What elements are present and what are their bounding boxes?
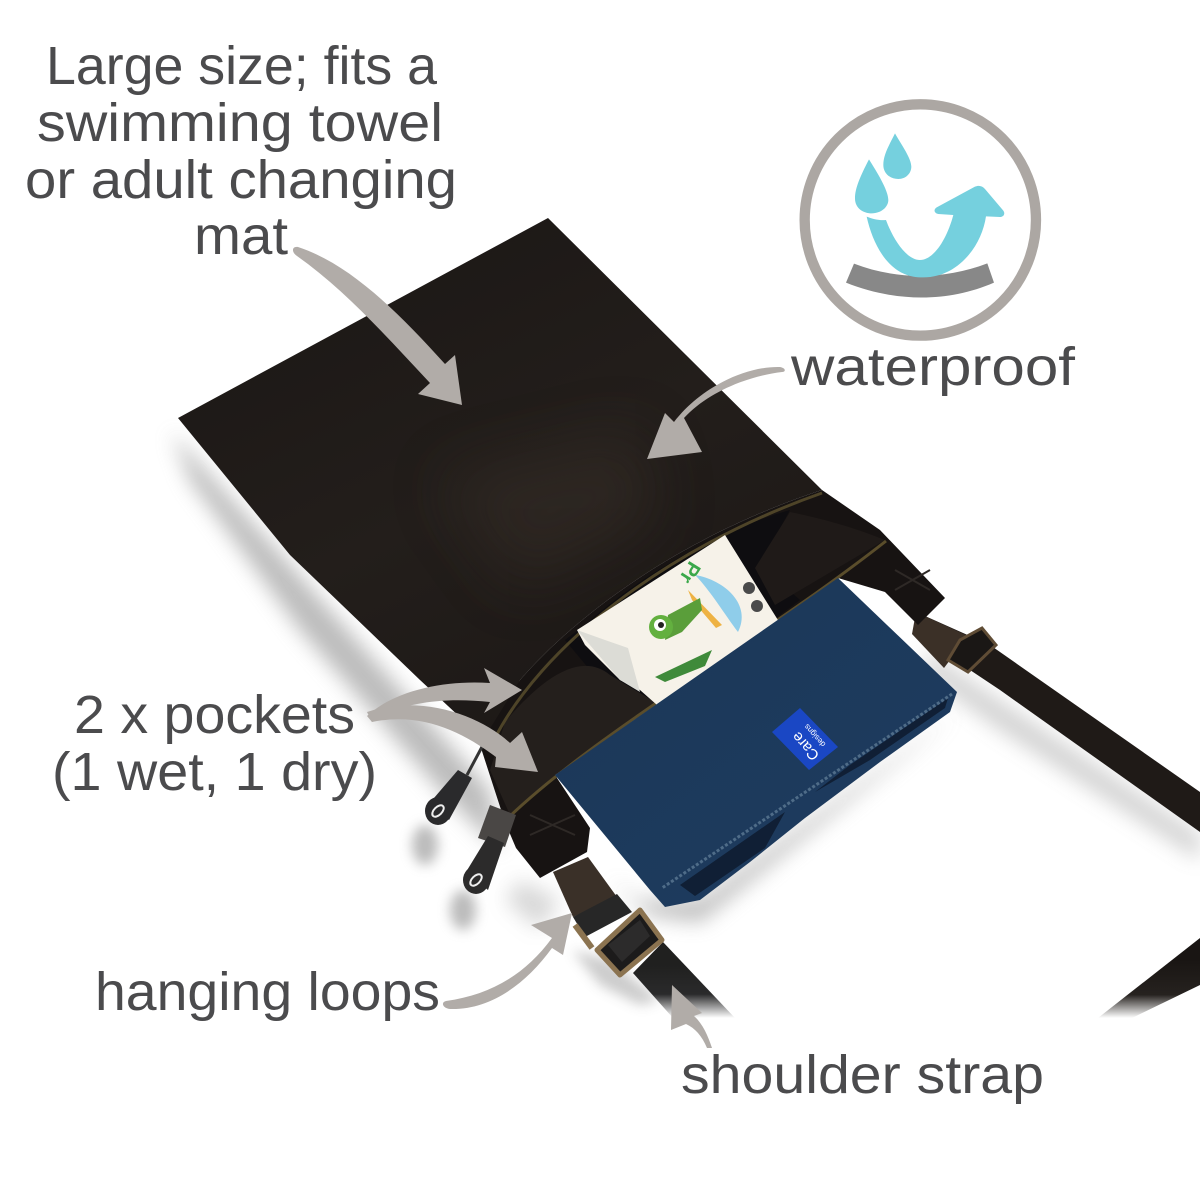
heading: large size: Large size; fits a [46, 36, 438, 96]
arrow: hanging loops [443, 913, 572, 1009]
heading: large size: mat [194, 206, 288, 266]
arrow: shoulder strap [671, 985, 712, 1048]
package of baby wipes: Pr [674, 557, 704, 587]
pocket band with zippers [480, 490, 945, 878]
black bag body [178, 218, 822, 745]
package of baby wipes [577, 535, 781, 705]
label: shoulder strap: shoulder strap [681, 1045, 1044, 1105]
label: waterproof: waterproof [790, 337, 1076, 397]
arrow: large size [293, 247, 462, 405]
white floor cut below straps [560, 1018, 1200, 1078]
upper zip pull [425, 745, 483, 825]
navy changing mat [555, 578, 957, 907]
label: pockets: (1 wet, 1 dry) [52, 742, 377, 802]
right shoulder strap [912, 612, 1200, 1018]
lower zip pull [463, 805, 516, 894]
bag fabric highlight [497, 466, 626, 556]
blue brand label: designs [802, 722, 827, 749]
label: pockets: 2 x pockets [74, 685, 355, 745]
arrow: wet pocket [367, 668, 522, 722]
blue brand label: Care [789, 728, 823, 764]
label: hanging loops: hanging loops [95, 962, 440, 1022]
heading: large size: swimming towel [37, 93, 443, 153]
arrow: waterproof [647, 367, 785, 459]
label: pockets [52, 685, 377, 802]
icon: waterproof badge [805, 104, 1036, 336]
drop shadows under the bag [172, 432, 1200, 1005]
heading: large size: or adult changing [25, 150, 457, 210]
blue brand label [772, 708, 838, 770]
heading: large size [25, 36, 457, 266]
left strap with buckle [553, 857, 735, 1018]
arrow: dry pocket [367, 705, 538, 772]
